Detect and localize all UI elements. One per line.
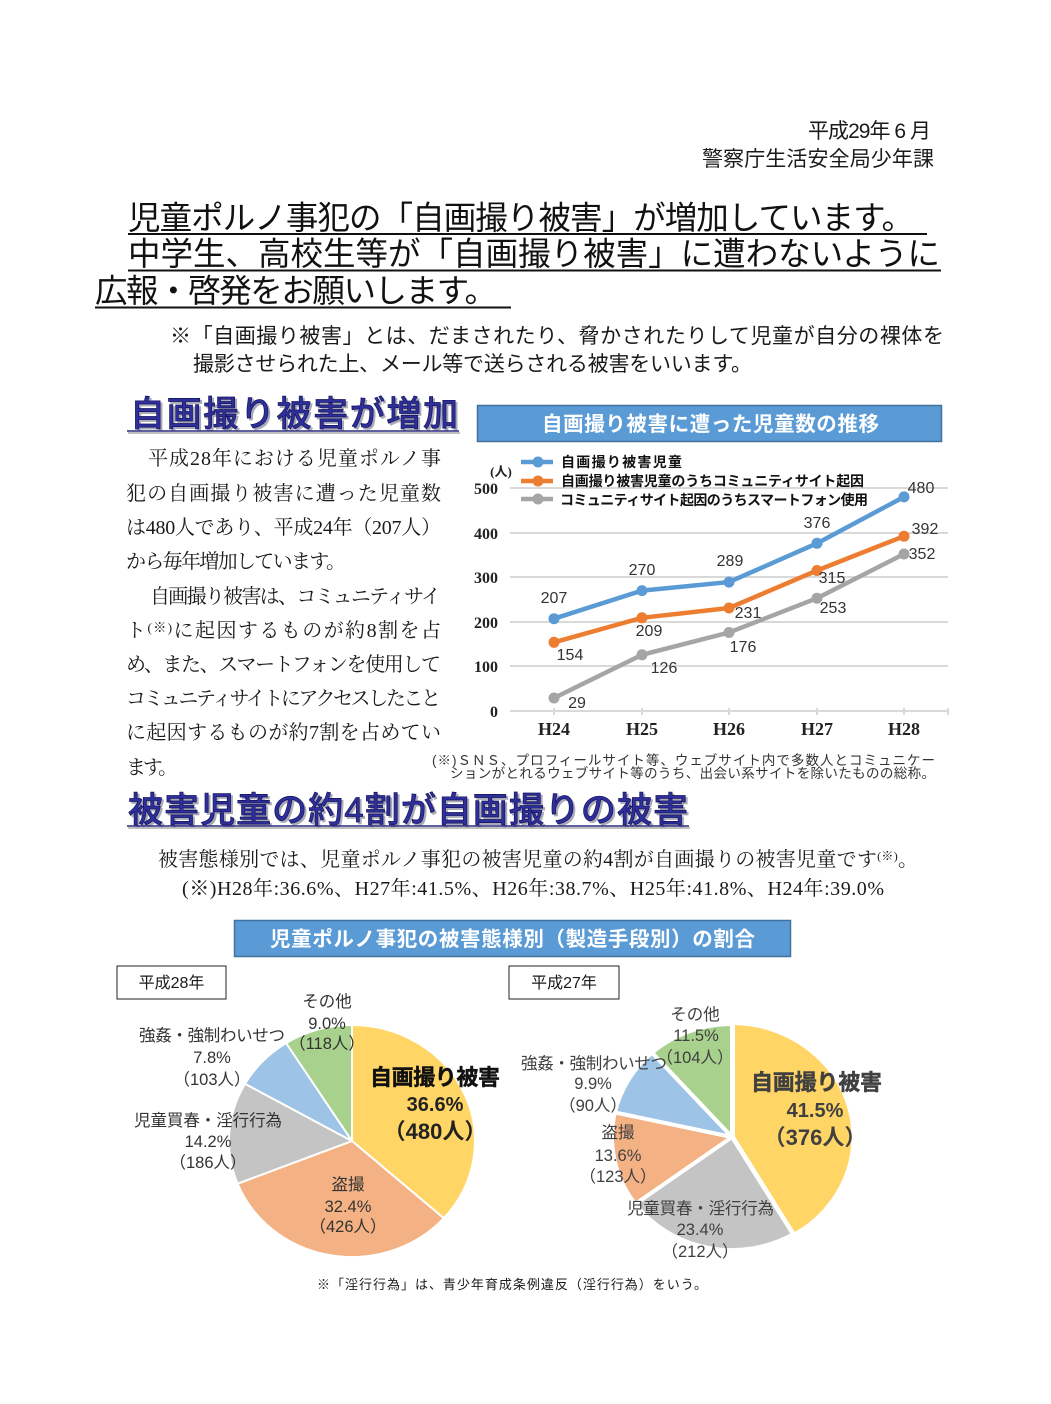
data labels: 352	[909, 546, 935, 563]
line chart: H27	[801, 719, 833, 739]
text block: increase explanation: 犯の自画撮り被害に遭った児童数	[126, 482, 441, 505]
chart footnote	[432, 752, 935, 781]
pie labels: H28: 児童買春・淫行行為	[134, 1111, 282, 1130]
pie labels: H28: その他	[302, 992, 352, 1011]
line chart: H26	[713, 719, 745, 739]
text block: share by type: 被害態様別では、児童ポルノ事犯の被害児童の約4割が自画撮りの被害児童です	[158, 849, 877, 871]
pie labels: H28: （186人）	[169, 1153, 247, 1172]
text block: increase explanation: に起因するものが約7割を占めてい	[126, 721, 441, 744]
text block: increase explanation: は480人であり、平成24年（207人）	[126, 516, 441, 539]
text block: increase explanation: ます。	[126, 757, 178, 779]
text block: increase explanation: 自画撮り被害は、コミュニティサイ	[150, 585, 441, 608]
pie labels: H27: 13.6%	[595, 1147, 642, 1165]
heading: about 40 percent: 被害児童の約4割が自画撮りの被害	[128, 791, 688, 830]
data labels	[541, 480, 938, 712]
title	[95, 200, 941, 309]
panel: line chart header: 自画撮り被害に遭った児童数の推移	[542, 413, 879, 436]
line chart: (人)	[490, 464, 512, 479]
line chart	[474, 454, 948, 739]
line chart: 500	[474, 481, 498, 498]
heading: increase: 自画撮り被害が増加	[130, 395, 458, 434]
text block: increase explanation: コミュニティサイトにアクセスしたこと	[126, 688, 441, 710]
title: 広報・啓発をお願いします。	[95, 273, 497, 309]
text block: increase explanation: に起因するものが約8割を占	[174, 619, 441, 642]
text block: increase explanation: ト	[126, 620, 146, 642]
pie labels: H28: 9.0%	[308, 1015, 346, 1033]
line chart: 400	[474, 526, 498, 543]
title: 児童ポルノ事犯の「自画撮り被害」が増加しています。	[128, 200, 914, 236]
pie labels: H27: 23.4%	[677, 1221, 724, 1239]
year label: H27	[509, 966, 619, 999]
pie labels: H27: 盗撮	[602, 1123, 635, 1142]
title: 中学生、高校生等が「自画撮り被害」に遭わないように	[128, 236, 940, 272]
definition note: 撮影させられた上、メール等で送らされる被害をいいます。	[193, 353, 752, 376]
pie labels: H27: （376人）	[764, 1125, 866, 1150]
pie labels: H27: 自画撮り被害	[751, 1070, 882, 1095]
pie labels: H28	[134, 992, 500, 1236]
pie labels: H27: （90人）	[559, 1096, 627, 1115]
pie labels: H28: 盗撮	[332, 1175, 365, 1194]
date and issuing office: 警察庁生活安全局少年課	[702, 148, 934, 171]
legend: 自画撮り被害児童	[561, 454, 682, 470]
data labels: 392	[912, 521, 938, 538]
line chart: 100	[474, 659, 498, 676]
line chart: 0	[490, 704, 498, 721]
text block: increase explanation: から毎年増加しています。	[126, 550, 346, 573]
pie labels: H28: 14.2%	[185, 1133, 232, 1151]
pie labels: H28: （480人）	[384, 1119, 486, 1144]
pie labels: H27: 11.5%	[673, 1027, 719, 1045]
series: total victims	[548, 491, 910, 624]
pie chart: H27	[521, 1005, 882, 1261]
legend: 自画撮り被害児童のうちコミュニティサイト起因	[561, 473, 864, 489]
pie labels: H27: 児童買春・淫行行為	[627, 1199, 774, 1218]
chart footnote: (※)ＳＮＳ、プロフィールサイト等、ウェブサイト内で多数人とコミュニケー	[432, 752, 935, 768]
year label: H28	[117, 966, 226, 999]
data labels: 231	[735, 605, 761, 622]
data labels: 480	[908, 480, 934, 497]
data labels: 289	[717, 553, 743, 570]
date and issuing office: 平成29年 6 月	[808, 120, 931, 143]
data labels: 154	[557, 647, 583, 664]
data labels: 29	[568, 695, 586, 712]
panel: pie charts header	[234, 920, 790, 956]
data labels: 253	[820, 600, 846, 617]
panel: line chart header	[478, 406, 942, 442]
pie labels: H28: 7.8%	[193, 1049, 231, 1067]
pie labels: H27	[521, 1005, 882, 1261]
data labels: 207	[541, 590, 567, 607]
pie labels: H27: （104人）	[656, 1048, 734, 1067]
pie labels: H27: その他	[670, 1005, 720, 1024]
line chart: H24	[538, 719, 570, 739]
panel: pie charts header: 児童ポルノ事犯の被害態様別（製造手段別）の割合	[270, 928, 756, 951]
series: smartphone	[548, 548, 910, 704]
data labels: 126	[651, 660, 677, 677]
year label: H27: 平成27年	[531, 974, 597, 992]
pie labels: H28: 36.6%	[407, 1094, 464, 1116]
line chart: 300	[474, 570, 498, 587]
text block: increase explanation	[126, 447, 441, 779]
text block: share by type: 。	[898, 849, 918, 871]
line chart: H25	[626, 719, 658, 739]
pie labels: H28: （103人）	[173, 1070, 251, 1089]
pie chart: H28	[134, 992, 500, 1257]
chart footnote: ションがとれるウェブサイト等のうち、出会い系サイトを除いたものの総称。	[450, 765, 935, 781]
data labels: 376	[804, 515, 830, 532]
data labels: 209	[636, 623, 662, 640]
pie labels: H28: 強姦・強制わいせつ	[139, 1026, 285, 1045]
bottom footnote: ※「淫行行為」は、青少年育成条例違反（淫行行為）をいう。	[317, 1277, 707, 1292]
pie labels: H28: （118人）	[289, 1034, 365, 1053]
legend: コミュニティサイト起因のうちスマートフォン使用	[560, 492, 868, 508]
text block: increase explanation: 平成28年における児童ポルノ事	[148, 447, 441, 470]
text block: increase explanation: め、また、スマートフォンを使用して	[126, 653, 441, 676]
pie labels: H28: （426人）	[309, 1217, 387, 1236]
pie labels: H27: （212人）	[661, 1242, 739, 1261]
pie labels: H27: 9.9%	[574, 1075, 612, 1093]
pie labels: H27: （123人）	[579, 1167, 657, 1186]
text block: share by type: (※)H28年:36.6%、H27年:41.5%、H26年:38.7%、H25年:41.8%、H24年:39.0%	[182, 877, 884, 900]
definition note	[170, 325, 944, 376]
data labels: 315	[819, 570, 845, 587]
pie labels: H27: 強姦・強制わいせつ	[521, 1054, 667, 1073]
text block: increase explanation: (※)	[147, 620, 172, 635]
year label: H28: 平成28年	[139, 974, 204, 992]
line chart: H28	[888, 719, 920, 739]
date and issuing office	[702, 120, 934, 171]
pie labels: H27: 41.5%	[787, 1100, 844, 1122]
definition note: ※「自画撮り被害」とは、だまされたり、脅かされたりして児童が自分の裸体を	[170, 325, 944, 348]
pie labels: H28: 32.4%	[325, 1198, 372, 1216]
text block: share by type: (※)	[877, 849, 898, 863]
legend	[521, 454, 868, 508]
data labels: 176	[730, 639, 756, 656]
data labels: 270	[629, 562, 655, 579]
line chart: 200	[474, 615, 498, 632]
series: community sites	[548, 531, 910, 648]
text block: share by type	[158, 848, 918, 900]
pie labels: H28: 自画撮り被害	[370, 1065, 500, 1090]
